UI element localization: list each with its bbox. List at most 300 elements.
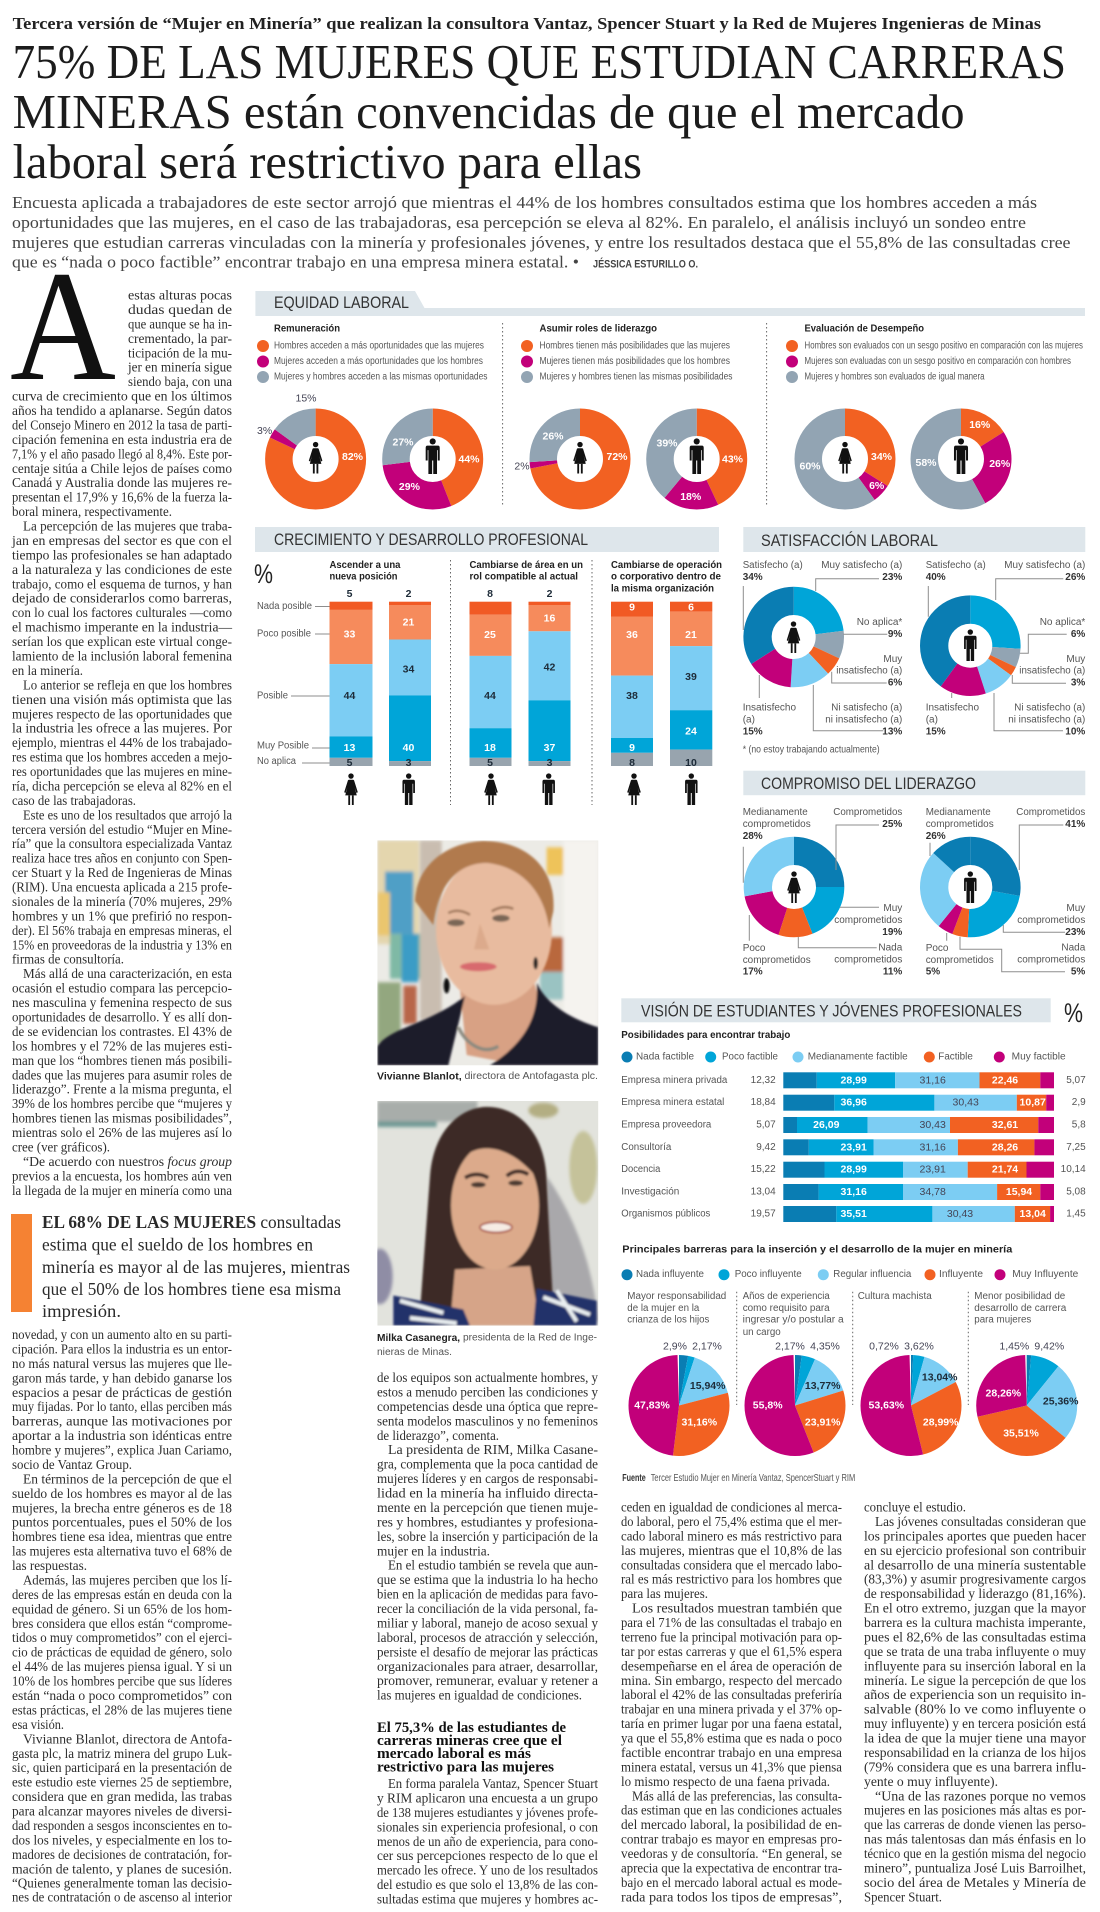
row: empresa proveedora: 5,8 (1072, 1120, 1086, 1130)
pie: desarrollo de carrera: 9,42% (1034, 1341, 1064, 1353)
pie: crianza de los hijos: 2,9% (663, 1341, 687, 1353)
legend: desempeño: Mujeres y hombres son evaluados de igual manera (804, 372, 985, 382)
title: laboral será restrictivo para ellas (13, 134, 642, 189)
pie: desarrollo de carrera (974, 1291, 1079, 1439)
donut: compromiso mujeres: 25% (882, 819, 902, 830)
article column 3: veedoras y de consultoría. “En general, se (621, 1846, 842, 1861)
article column 1 lower: equidad de género. Si un 65% de los hom- (12, 1601, 232, 1616)
article column 1 upper: “De acuerdo con nuestros focus group (23, 1154, 232, 1169)
donut: satisfacción hombres: 26% (1065, 572, 1085, 583)
article column 1 upper: de se evidencian los contrastes. El 43% de (12, 1024, 232, 1039)
category labels (257, 601, 330, 767)
row: docencia (621, 1162, 1086, 1178)
donut: liderazgo hombres (656, 422, 744, 503)
article column 1 upper: mientras solo el 26% de las mujeres así lo (12, 1125, 232, 1140)
stacked bar: área mujeres: 8 (487, 588, 493, 600)
row: empresa minera privada: 31,16 (920, 1074, 946, 1086)
stacked bar: ascender hombres: 40 (403, 742, 414, 754)
article column 1 upper: dejado de considerarlos como barreras, (12, 591, 232, 606)
stacked bar: ascender mujeres: 5 (347, 757, 353, 769)
legend: factibilidad: Muy factible (1012, 1052, 1066, 1062)
article column 1 upper: ría, dicha percepción se eleva al 82% en el (12, 778, 232, 794)
article column 4: años de experiencia son un requisito in- (864, 1687, 1086, 1702)
row: consultoría (621, 1139, 1086, 1155)
stacked bar: operación mujeres (611, 601, 653, 805)
section header: compromiso (743, 771, 1085, 795)
article column 4: nas más talentosas dan más énfasis en lo (864, 1832, 1086, 1847)
donut: compromiso hombres: comprometidos (926, 955, 994, 966)
category labels: Posible (257, 690, 288, 702)
donut: compromiso hombres: 41% (1065, 819, 1085, 830)
article column 1 lower: hombres tiene esa idea, mientras que entre (12, 1529, 232, 1544)
donut: compromiso mujeres: 11% (883, 966, 902, 978)
article column 1 lower: para alcanzar mayores niveles de diversi- (12, 1804, 232, 1818)
article column 1 lower: hombre y mujeres”, explica Juan Cariamo, (12, 1442, 232, 1458)
pie: cultura machista: Cultura machista (858, 1291, 932, 1302)
photo: Vivianne Blanlot (377, 840, 598, 1065)
article column 1 upper: cree (ver gráficos). (12, 1140, 110, 1154)
article column 3: lo mismo respecto de una faena privada. (621, 1774, 830, 1789)
donut: remuneración hombres: 29% (399, 481, 421, 493)
stacked bar: operación hombres (670, 601, 712, 805)
article column 4: socio del área de Metales y Minería de (864, 1875, 1086, 1890)
legend: factibilidad (622, 1052, 1066, 1062)
donut: liderazgo mujeres: 2% (514, 460, 530, 472)
article column 3: aprecia que la expectativa de encontrar tra- (621, 1860, 842, 1876)
article column 1 lower: Vivianne Blanlot, directora de Antofa- (23, 1731, 232, 1746)
donut: satisfacción hombres: Muy (1066, 654, 1085, 665)
row: docencia: 23,91 (920, 1164, 946, 1176)
article column 3: trabajar en una minera privada y el 37% op- (621, 1702, 842, 1717)
article column 4: (83,3%) y asumir progresivamente cargos (864, 1572, 1086, 1587)
article column 1 lower (12, 1327, 233, 1904)
category labels: Nada posible (257, 601, 312, 612)
article column 1 upper: que aunque se ha in- (128, 316, 232, 331)
row: empresa proveedora: 32,61 (992, 1119, 1018, 1131)
stacked bar: operación hombres: 6 (688, 601, 694, 613)
chart heading: cambiarse de área (470, 560, 583, 582)
row: empresa proveedora: 30,43 (920, 1119, 946, 1131)
article column 3: Los resultados muestran también que (632, 1601, 842, 1616)
pie: crianza de los hijos: crianza de los hijos (627, 1314, 709, 1326)
caption: Milka Casanegra (377, 1332, 597, 1358)
article column 4: de responsabilidad y liderazgo (81,16%). (864, 1586, 1086, 1601)
article column 3: contrar trabajo es mayor en empresas pro- (621, 1832, 842, 1847)
stacked bar: ascender mujeres: 44 (344, 690, 355, 702)
article column 1 upper: centaje sitúa a Chile lejos de países como (12, 461, 232, 476)
donut: liderazgo mujeres: 72% (606, 451, 628, 463)
row: empresa minera estatal (621, 1095, 1086, 1111)
article column 2 upper: promover, remunerar, evaluar y retener a (377, 1673, 598, 1688)
article column 1 lower: novedad, y con un aumento alto en su parti- (12, 1327, 232, 1342)
donut: satisfacción mujeres: 34% (743, 572, 763, 583)
donut: compromiso mujeres (743, 807, 903, 978)
article column 2 lower: del estudio es que solo el 13,8% de las con- (377, 1877, 598, 1892)
article column 1 upper: firmas de consultoría. (12, 952, 124, 967)
article column 1 lower: dos los niveles, y especialmente en los to- (12, 1832, 232, 1847)
article column 2 upper (377, 1370, 598, 1703)
row: empresa minera estatal: 36,96 (841, 1097, 867, 1109)
panel: crecimiento y desarrollo profesional (254, 527, 722, 805)
legend: influencia: Regular influencia (833, 1269, 912, 1280)
donut: compromiso mujeres: Poco (743, 943, 766, 954)
panel: visión de estudiantes y jóvenes profesionales (621, 998, 1086, 1222)
article column 1 lower: puntos porcentuales, pues el 50% de los (12, 1515, 232, 1530)
row: investigación: Investigación (621, 1186, 679, 1198)
pie: crianza de los hijos: Mayor responsabilidad (627, 1291, 726, 1302)
pie: desarrollo de carrera: 35,51% (1003, 1427, 1039, 1439)
stacked bar: operación hombres: 10 (685, 757, 697, 769)
donut: remuneración hombres: 27% (392, 436, 414, 448)
article column 3: las mujeres, mientras que el 10,8% de las (621, 1543, 842, 1558)
article column 1 upper: trabajo, como el esquema de turnos, y han (12, 576, 232, 591)
article column 1 upper: 7,1% y el año pasado llegó al 8,4%. Este por- (12, 446, 232, 461)
pie: desarrollo de carrera: 25,36% (1043, 1396, 1079, 1408)
legend: liderazgo (521, 324, 732, 383)
article column 1 upper: Este es uno de los resultados que arrojó la (23, 807, 232, 822)
article column 3: bajo en el mercado laboral actual es mode- (621, 1875, 842, 1890)
article column 1 upper: hombres y un 1% que prefirió no respon- (12, 908, 232, 923)
article column 1 upper: tiempo las profesionales se han adaptado (12, 547, 232, 562)
donut: compromiso hombres: comprometidos (1017, 915, 1085, 926)
pie: crianza de los hijos: 2,17% (692, 1341, 722, 1353)
article column 4: los principales aportes que pueden hacer (864, 1528, 1087, 1543)
pie: años de experiencia: 13,77% (805, 1380, 841, 1392)
row: empresa minera privada (621, 1072, 1086, 1088)
donut: satisfacción hombres: 15% (926, 726, 946, 738)
article column 1 lower: garon más tarde, y han debido ganarse los (12, 1370, 232, 1385)
pie: cultura machista: 3,62% (904, 1341, 934, 1353)
chart heading: ascender: nueva posición (330, 572, 398, 582)
legend: factibilidad: Nada factible (636, 1052, 694, 1062)
donut: compromiso hombres: 5% (926, 966, 940, 978)
stacked bar: operación mujeres: 36 (626, 629, 638, 641)
article column 3 (621, 1500, 842, 1904)
article column 3: do laboral, pero el 75,4% estima que el mer- (621, 1514, 842, 1529)
pie: desarrollo de carrera: desarrollo de carrera (974, 1303, 1067, 1314)
article column 1 lower: espacios a pesar de prácticas de gestión (12, 1385, 232, 1400)
subheading: posibilidades: Posibilidades para encontrar trabajo (621, 1030, 790, 1041)
subheading: 75,3%: mercado laboral es más (377, 1746, 531, 1762)
donut: compromiso hombres: 5% (1071, 966, 1085, 978)
stacked bar: área mujeres: 18 (484, 742, 496, 754)
pie: desarrollo de carrera: para mujeres (974, 1314, 1031, 1326)
article column 3: mina. Sin embargo, respecto del mercado (621, 1673, 842, 1688)
legend: influencia: Nada influyente (636, 1269, 704, 1280)
article column 3: Más allá de las preferencias, las consulta- (632, 1788, 842, 1803)
article column 2 upper: La presidenta de RIM, Milka Casane- (388, 1442, 598, 1457)
row: consultoría: 31,16 (920, 1141, 946, 1153)
donut: satisfacción hombres: Satisfecho (a) (926, 560, 986, 571)
article column 4: En el otro extremo, juzgan que la mayor (864, 1601, 1087, 1616)
donut: desempeño mujeres (799, 422, 893, 496)
donut: satisfacción hombres (926, 560, 1085, 738)
legend: factibilidad: Medianamente factible (808, 1052, 908, 1062)
row: organismos públicos: 1,45 (1066, 1208, 1086, 1220)
row: empresa minera privada: Empresa minera privada (621, 1075, 728, 1086)
article column 1 upper: tienen una visión más optimista que las (12, 692, 232, 707)
donut: compromiso hombres: comprometidos (926, 819, 994, 830)
article column 3: ral es más restrictivo para los hombres que (621, 1572, 842, 1587)
article column 2 lower: mercado les ofrece. Y uno de los resultados (377, 1863, 598, 1878)
donut: satisfacción hombres: insatisfecho (a) (1019, 666, 1085, 676)
article column 2 lower: cer sus percepciones respecto de lo que el (377, 1848, 598, 1863)
article column 2 upper: mujeres líderes y en cargos de responsabi- (377, 1471, 598, 1486)
subheading: 75,3%: restrictivo para las mujeres (377, 1760, 554, 1776)
article column 1 lower: madores de decisiones de contratación, for- (12, 1847, 232, 1862)
title: MINERAS están convencidas de que el mercado (13, 84, 965, 139)
legend: liderazgo: Asumir roles de liderazgo (540, 324, 657, 334)
row: investigación: 31,16 (841, 1186, 867, 1198)
row: empresa proveedora: 26,09 (813, 1119, 840, 1131)
row: investigación: 13,04 (751, 1186, 776, 1198)
title (13, 34, 1066, 189)
stacked bar: área hombres: 3 (547, 757, 553, 769)
donut: remuneración mujeres (257, 392, 364, 496)
article column 1 upper: ría” que la consultora especializada Vantaz (12, 836, 232, 851)
deck: mujeres que estudian carreras vinculadas con la minería y profesionales jóvenes, y entre los resultados destaca que el 55,8% de las consultadas cree (12, 233, 1070, 252)
donut: compromiso mujeres: comprometidos (834, 954, 902, 966)
stacked bar: operación hombres: 21 (685, 629, 697, 641)
stacked bar: ascender mujeres (330, 588, 372, 805)
row: investigación: 5,08 (1066, 1186, 1086, 1198)
donut: liderazgo mujeres (514, 422, 628, 496)
subheading: barreras: Principales barreras para la inserción y el desarrollo de la mujer en minería (622, 1244, 1013, 1256)
pie: cultura machista: 0,72% (869, 1341, 899, 1353)
article column 1 lower: bres considera que ellos están “comprome- (12, 1616, 232, 1631)
stacked bar: área mujeres (470, 588, 512, 805)
article column 1 upper: 15% en proveedoras de la industria y 13% en (12, 937, 232, 952)
row: organismos públicos: 13,04 (1020, 1208, 1046, 1220)
donut: satisfacción hombres: 40% (926, 572, 946, 583)
donut: satisfacción mujeres: (a) (743, 714, 755, 726)
article column 1 upper: La percepción de las mujeres que traba- (23, 518, 232, 534)
legend: remuneración: Hombres acceden a más oportunidades que las mujeres (274, 340, 484, 352)
article column 1 upper: ticipación de la mu- (128, 345, 232, 360)
article column 2 upper: miliar y laboral, manejo de acoso sexual y (377, 1616, 598, 1630)
article column 4: yente o muy influyente). (864, 1774, 998, 1789)
donut: compromiso mujeres: Medianamente (743, 807, 808, 818)
article column 3: factible encontrar trabajo en una empresa (621, 1745, 842, 1760)
article column 1 lower: las respuestas. (12, 1558, 87, 1573)
stacked bar: área mujeres: 44 (484, 690, 496, 702)
donut: satisfacción hombres: 10% (1065, 726, 1085, 738)
article column 4: minero”, puntualiza José Luis Barroilhet, (864, 1860, 1086, 1876)
donut: satisfacción hombres: Muy satisfecho (a) (1004, 560, 1085, 571)
stacked bar: ascender hombres: 2 (406, 588, 412, 600)
article column 2 lower: de 138 mujeres estudiantes y jóvenes profe- (377, 1805, 598, 1820)
chart heading: cambiarse de operación (611, 560, 722, 594)
row: consultoría: 23,91 (841, 1141, 867, 1153)
donut: satisfacción mujeres: ni insatisfecho (a) (825, 714, 902, 726)
article column 1 upper: caso de las trabajadoras. (12, 793, 136, 808)
article column 1 upper: serían los que explican este virtual conge- (12, 634, 232, 649)
article column 1 lower: “Quienes generalmente toman las decisio- (12, 1876, 232, 1891)
article column 1 upper: jan en empresas del sector es que con el (11, 533, 232, 548)
donut: satisfacción mujeres: No aplica* (857, 617, 902, 628)
article column 1 lower: las mujeres esta alternativa tuvo el 68% de (12, 1544, 232, 1559)
article column 1 upper: crementado, la par- (128, 331, 232, 346)
donut: satisfacción mujeres: 23% (882, 572, 902, 583)
article column 1 lower: 10% de los hombres percibe que sus líderes (12, 1674, 232, 1689)
category labels: Muy Posible (257, 740, 309, 752)
legend: factibilidad: Poco factible (722, 1052, 778, 1062)
article column 2 lower (377, 1776, 598, 1906)
pie: desarrollo de carrera: 1,45% (999, 1341, 1029, 1353)
article column 2 upper: de los equipos son actualmente hombres, y (377, 1370, 598, 1385)
pie: crianza de los hijos: 47,83% (634, 1400, 670, 1412)
callout: 68%: que el 50% de los hombres tiene esa misma (42, 1279, 341, 1299)
donut: compromiso mujeres: 28% (743, 831, 763, 842)
percent sign: % (1064, 998, 1083, 1028)
row: docencia: 21,74 (992, 1164, 1018, 1176)
article column 1 upper: ejemplo, mientras el 44% de los trabajado- (12, 735, 232, 750)
article column 1 lower: deres de las empresas están en deuda con la (12, 1587, 232, 1602)
article column 2 upper: bien en la aplicación de medidas para favo- (377, 1587, 598, 1602)
percent sign: % (254, 559, 273, 589)
article column 1 upper: el machismo imperante en la industria— (12, 620, 233, 635)
article column 3: rada para todos los tipos de empresas”, (621, 1889, 842, 1904)
callout: 68%: impresión. (42, 1301, 121, 1321)
article column 2 upper: lidad en la minería ha influido directa- (377, 1486, 598, 1500)
article column 3: del mercado laboral, la posibilidad de en- (621, 1817, 842, 1832)
article column 1 upper: la industria les ofrece a las mujeres. Por (12, 721, 233, 736)
donut: remuneración hombres (392, 422, 480, 496)
stacked bar: operación hombres: 39 (685, 671, 697, 683)
subheading: 75,3%: carreras mineras cree que el (377, 1733, 562, 1749)
donut: liderazgo mujeres: 26% (542, 430, 564, 442)
legend: influencia: Poco influyente (735, 1269, 802, 1280)
donut: satisfacción hombres: No aplica* (1040, 617, 1085, 628)
pie: años de experiencia: 4,35% (810, 1341, 840, 1353)
row: organismos públicos: Organismos públicos (621, 1208, 710, 1220)
stacked bar: área hombres: 16 (544, 612, 555, 624)
pie: años de experiencia: 2,17% (775, 1341, 805, 1353)
pie: crianza de los hijos: 31,16% (681, 1416, 718, 1428)
article column 1 upper: presentan el 17,9% y 16,6% de la fuerza la- (12, 490, 232, 505)
article column 4: la idea de que la mujer tiene una mayor (864, 1730, 1087, 1746)
deck: JÉSSICA ESTURILLO O. (593, 258, 698, 270)
row: empresa minera privada: 12,32 (751, 1075, 776, 1086)
article column 2 upper: persiste el desafío de mejorar las prácticas (377, 1644, 598, 1659)
pie: desarrollo de carrera: 28,26% (985, 1387, 1022, 1399)
stacked bar: área hombres: 37 (544, 742, 555, 754)
article column 1 lower: Además, las mujeres perciben que los lí- (23, 1572, 232, 1588)
article column 1 lower: el 44% de las mujeres piensa igual. Y si un (12, 1659, 232, 1674)
donut: satisfacción mujeres: Insatisfecho (743, 702, 797, 714)
article column 1 upper: (RIM). Una encuesta aplicada a 215 profe- (12, 880, 232, 894)
photo: Milka Casanegra (367, 1101, 598, 1326)
article column 1 upper: siendo baja, con una (128, 374, 232, 389)
deck: oportunidades que las mujeres, en el caso de las trabajadoras, esa percepción se eleva al 82%. En paralelo, el análisis incluyó un sondeo entre (12, 213, 1026, 232)
article column 3: das estiman que en las condiciones actuales (621, 1803, 842, 1818)
article column 4 (864, 1500, 1087, 1904)
article column 1 upper: dudas quedan de (128, 302, 232, 317)
stacked bar: área hombres: 2 (547, 588, 553, 600)
chart heading: ascender: Ascender a una (330, 560, 401, 571)
article column 1 upper: sionales de la minería (70% mujeres, 29% (12, 894, 232, 909)
article column 3: ceden en igualdad de condiciones al merca- (621, 1500, 842, 1514)
article column 1 upper (11, 288, 233, 1198)
legend: desempeño: Evaluación de Desempeño (804, 324, 924, 334)
article column 3: minera estatal, versus un 41,3% que piensa (621, 1759, 842, 1774)
callout: 68%: minería es mayor al de las mujeres, mientras (42, 1257, 350, 1277)
article column 2 upper: recer la conciliación de la vida personal, fa- (377, 1601, 598, 1616)
pie: años de experiencia (743, 1291, 844, 1431)
section header: visión: VISIÓN DE ESTUDIANTES Y JÓVENES PROFESIONALES (641, 1002, 1022, 1021)
row: organismos públicos: 35,51 (841, 1208, 867, 1220)
row: investigación: 15,94 (1006, 1186, 1032, 1198)
article column 1 upper: mujeres respecto de las oportunidades que (12, 706, 232, 721)
article column 1 upper: estas alturas pocas (128, 288, 232, 302)
legend: influencia (622, 1269, 1079, 1280)
legend: factibilidad: Factible (938, 1052, 973, 1062)
article column 1 lower: aportar a la industria son idénticas entre (12, 1428, 232, 1443)
legend: influencia: Influyente (939, 1269, 983, 1280)
legend: remuneración: Mujeres y hombres acceden a las mismas oportunidades (274, 372, 488, 382)
legend: remuneración: Mujeres acceden a más oportunidades que los hombres (274, 356, 483, 367)
article column 2 upper: gra, complementa que la poca cantidad de (377, 1457, 598, 1472)
donut: satisfacción mujeres: Muy satisfecho (a) (821, 560, 902, 571)
chart heading: cambiarse de operación: Cambiarse de operación (611, 560, 722, 571)
article column 4: mujeres en las posiciones más altas es por- (864, 1803, 1086, 1818)
section header: satisfacción: SATISFACCIÓN LABORAL (761, 531, 938, 550)
article column 1 lower: esa visión. (12, 1717, 64, 1732)
row: organismos públicos (621, 1206, 1086, 1222)
row: empresa minera estatal: 2,9 (1072, 1097, 1086, 1108)
donut: satisfacción mujeres: 15% (743, 726, 763, 738)
row: empresa minera privada: 5,07 (1066, 1075, 1086, 1086)
article column 1 lower: cio de prácticas de equidad de género, solo (12, 1645, 232, 1660)
stacked bar: área mujeres: 25 (484, 629, 496, 641)
donut: compromiso mujeres: Nada (878, 942, 903, 954)
pie: años de experiencia: 23,91% (805, 1416, 841, 1428)
article column 1 upper: res oportunidades que las mujeres en mine- (12, 764, 232, 779)
chart heading: cambiarse de área: Cambiarse de área en un (470, 560, 583, 571)
article column 4: concluye el estudio. (864, 1500, 966, 1514)
donut: remuneración hombres: 44% (458, 454, 480, 466)
donut: compromiso hombres: Medianamente (926, 807, 991, 818)
panel: compromiso del liderazgo (743, 771, 1086, 978)
article column 1 lower: sueldo de los hombres es mayor al de las (12, 1486, 232, 1501)
legend: remuneración: Remuneración (274, 324, 340, 334)
panel: principales barreras (622, 1244, 1079, 1484)
row: investigación (621, 1184, 1086, 1200)
legend: influencia: Muy Influyente (1012, 1269, 1079, 1280)
pie: cultura machista: 28,99% (923, 1416, 959, 1428)
article column 3: taría en primer lugar por una faena estatal, (621, 1716, 842, 1731)
donut: satisfacción mujeres: 6% (888, 678, 902, 688)
caption: Milka Casanegra: nieras de Minas. (377, 1347, 452, 1358)
legend: liderazgo: Mujeres y hombres tienen las mismas posibilidades (540, 372, 732, 382)
legend: desempeño (786, 324, 1083, 383)
stacked bar: área hombres: 42 (544, 662, 555, 674)
article column 2 upper: mente en la percepción que tienen muje- (377, 1500, 598, 1515)
source: Fuente (622, 1473, 646, 1484)
footnote: * (no estoy trabajando actualmente) (743, 744, 880, 756)
donut: compromiso hombres: 23% (1065, 927, 1085, 938)
category labels: No aplica (257, 756, 296, 767)
article column 1 lower: nes de contratación o de ascenso al interior (12, 1890, 233, 1904)
article column 3: desempeñarse en el área de operación de (621, 1658, 842, 1673)
article column 2 lower: sultadas estima que mujeres y hombres ac- (377, 1892, 598, 1906)
article column 4: responsabilidad en la crianza de los hijos (864, 1745, 1086, 1760)
article column 1 upper: lamiento de la inclusión laboral femenina (12, 648, 232, 664)
article column 1 upper: jer en minería sigue (127, 360, 232, 375)
article column 4: barrera es la cultura machista imperante, (864, 1615, 1086, 1630)
article column 1 upper: previos a la encuesta, los hombres aún ven (12, 1168, 232, 1183)
donut: desempeño hombres: 58% (915, 457, 937, 469)
